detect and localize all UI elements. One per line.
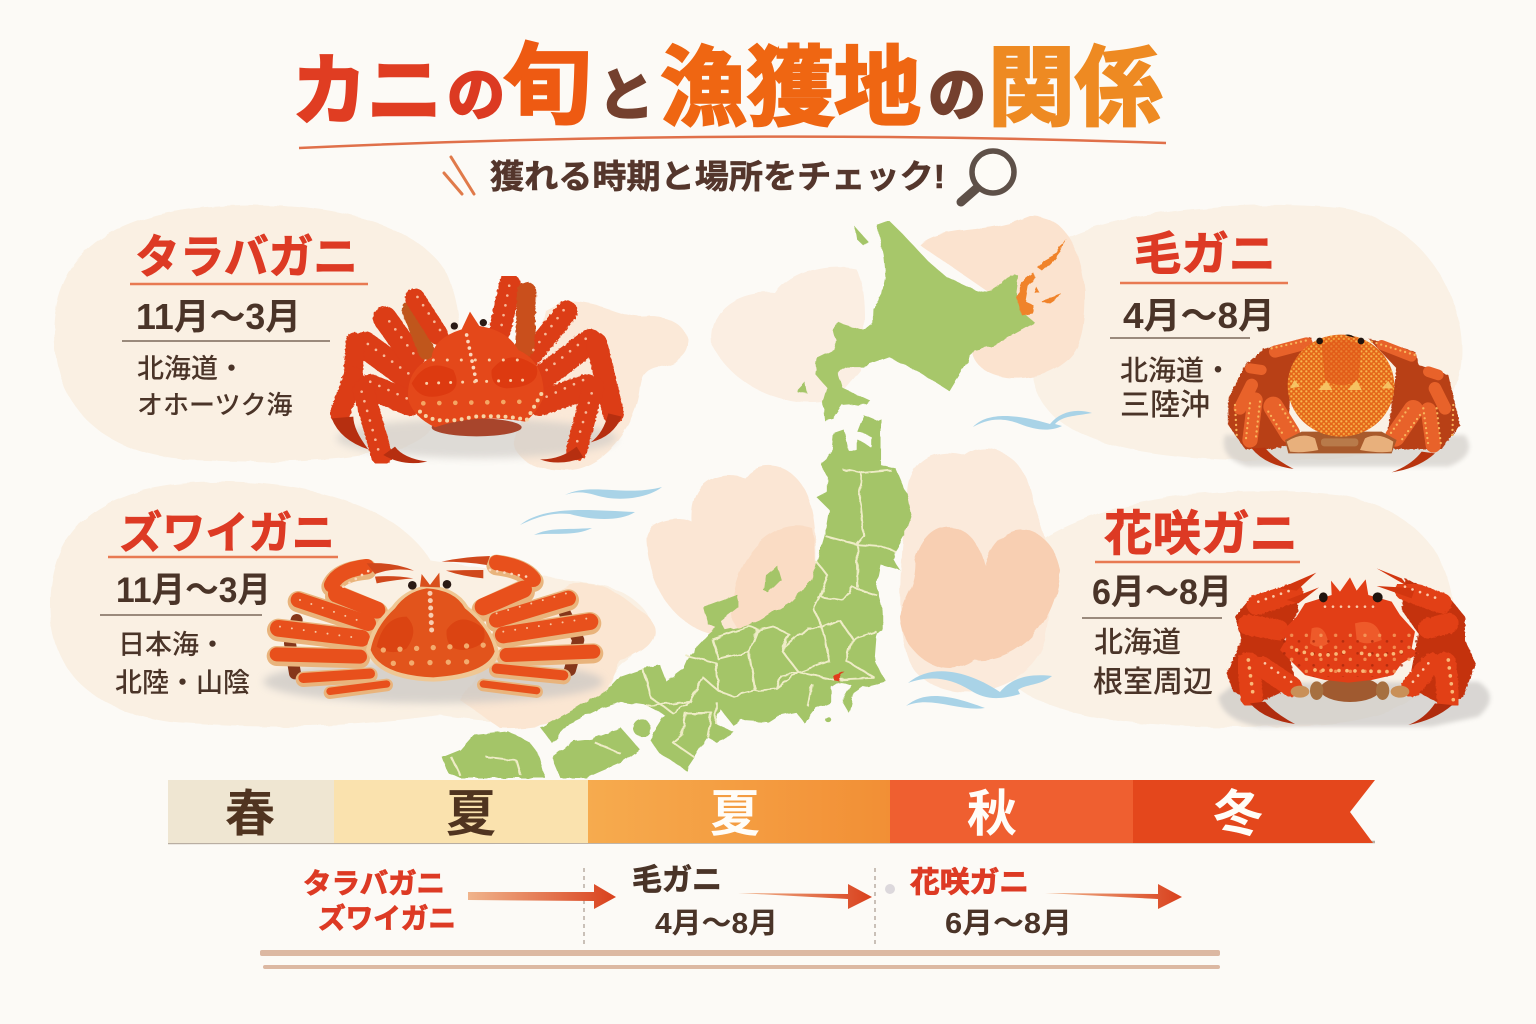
crab body mass [1228, 338, 1460, 449]
crab legs and claws [1248, 590, 1448, 700]
crab eyes [1316, 335, 1364, 344]
text block: kegani: 4月〜8月 [1123, 295, 1275, 336]
season: early summer [334, 780, 588, 843]
text block: zuwaigani [100, 509, 338, 698]
icon: grey dot [885, 884, 895, 894]
timeline: tarabagani and zuwaigani: ズワイガニ [318, 902, 456, 934]
crab shadow [1218, 682, 1490, 727]
text block: kegani: 北海道・ [1120, 355, 1232, 386]
title: 旬 [503, 36, 591, 135]
title: の [928, 63, 986, 128]
crab rim spots [1248, 650, 1453, 700]
map: Okhotsk catch area [1016, 238, 1065, 315]
text block: hanasakigani: 北海道 [1094, 626, 1181, 659]
crab dark leg joints [290, 613, 578, 673]
crab shadow [263, 660, 603, 703]
text block: tarabagani: オホーツク海 [137, 390, 292, 420]
map: Honshu [541, 415, 911, 770]
crab legs rim [277, 565, 593, 693]
crab underside [432, 418, 522, 436]
map: Shikoku [551, 728, 640, 778]
crab: kegani [1224, 335, 1469, 472]
season: early summer: 夏 [446, 786, 496, 842]
crab underside [1320, 677, 1380, 702]
crab: tarabagani [332, 282, 622, 463]
map sea blobs [646, 216, 1085, 692]
crab: hanasakigani [1218, 568, 1490, 727]
crab carapace [1288, 335, 1394, 437]
text block: tarabagani [122, 231, 368, 420]
map: small islands [633, 227, 868, 737]
map: Tokyo marker [833, 672, 845, 681]
season bar shadow [168, 842, 1375, 843]
panel: kegani background [1032, 205, 1462, 460]
icon: magnifier [961, 151, 1014, 202]
season: summer: 夏 [710, 786, 760, 842]
crab carapace [1280, 577, 1419, 683]
text block: tarabagani: 北海道・ [137, 354, 245, 384]
season bar [168, 780, 1375, 843]
text block: kegani [1110, 228, 1288, 422]
title: の [447, 63, 505, 128]
text block: tarabagani: 11月〜3月 [136, 296, 301, 337]
timeline: kegani: 4月〜8月 [655, 908, 778, 940]
season: autumn: 秋 [967, 786, 1017, 842]
crab pincers [1252, 448, 1435, 472]
crab claws [367, 556, 490, 583]
title: 関係 [988, 40, 1162, 137]
text block: tarabagani: タラバガニ [135, 231, 358, 283]
arrow [1045, 884, 1182, 909]
subtitle [444, 151, 1014, 202]
crab carapace [408, 312, 544, 427]
text block: kegani: 三陸沖 [1120, 389, 1210, 422]
season: winter: 冬 [1213, 786, 1263, 842]
crab: zuwaigani [263, 556, 603, 703]
season: autumn [890, 780, 1133, 843]
timeline [303, 864, 1182, 946]
crab pincers [1280, 568, 1415, 603]
crab underside [1285, 432, 1397, 453]
crab eyes [1319, 592, 1383, 602]
crab body mass [1227, 578, 1476, 707]
season: spring: 春 [225, 786, 275, 842]
timeline: hanasakigani: 6月〜8月 [945, 908, 1072, 940]
title underline [299, 137, 1166, 148]
crab legs inner [277, 563, 593, 691]
crab carapace [366, 585, 499, 682]
text block: zuwaigani: 北陸・山陰 [115, 668, 250, 698]
crab shadow [337, 418, 617, 458]
crab leg highlights [1240, 343, 1445, 445]
text block: hanasakigani [1082, 508, 1300, 699]
timeline: tarabagani and zuwaigani: タラバガニ [303, 868, 445, 899]
title: と [598, 64, 654, 127]
crab legs [340, 285, 613, 455]
crab leg spots [1235, 340, 1453, 445]
waves: left [520, 487, 662, 535]
season: summer [588, 780, 890, 843]
waves: lower right [906, 671, 1052, 709]
text block: zuwaigani: 日本海・ [118, 630, 226, 660]
crab bumps [1290, 380, 1393, 390]
title: カニ [292, 47, 442, 135]
crab rim and spots [420, 335, 542, 421]
text block: hanasakigani: 6月〜8月 [1092, 573, 1232, 612]
timeline: kegani: 毛ガニ [632, 864, 722, 897]
text block: zuwaigani: 11月〜3月 [116, 571, 271, 610]
arrow [468, 884, 616, 909]
subtitle text: 獲れる時期と場所をチェック! [490, 158, 945, 195]
map: prefecture borders [452, 469, 896, 776]
crab horns and eyes [420, 573, 440, 587]
title [292, 36, 1162, 137]
title: 漁獲地 [660, 40, 921, 137]
timeline: kegani [632, 864, 872, 940]
text block: kegani: 毛ガニ [1134, 228, 1276, 280]
crab carapace centre [1322, 340, 1362, 385]
map: Hokkaido [814, 220, 1035, 421]
text block: hanasakigani: 花咲ガニ [1104, 508, 1298, 561]
panel: tarabagani background [54, 205, 688, 470]
crab shadow [1224, 435, 1469, 467]
arrow [738, 884, 872, 909]
text block: hanasakigani: 根室周辺 [1093, 666, 1213, 699]
panel: hanasakigani background [988, 491, 1455, 727]
dashed dividers [584, 868, 875, 946]
crab spots [280, 570, 588, 663]
waves: upper right [973, 411, 1092, 430]
crab leg highlights [362, 282, 592, 450]
crab eyes [451, 319, 487, 330]
map of Japan [442, 220, 1065, 778]
crab pincers [332, 413, 622, 463]
timeline: hanasakigani: 花咲ガニ [910, 866, 1029, 899]
text block: zuwaigani: ズワイガニ [119, 509, 335, 558]
panel: zuwaigani background [50, 482, 655, 728]
bottom rules [260, 950, 1220, 969]
season: winter [1133, 780, 1375, 843]
season: spring [168, 780, 334, 843]
icon: accent slashes [444, 157, 474, 194]
timeline: tarabagani and zuwaigani [303, 868, 616, 934]
timeline: hanasakigani [910, 866, 1182, 940]
map: Kyushu [442, 731, 545, 778]
